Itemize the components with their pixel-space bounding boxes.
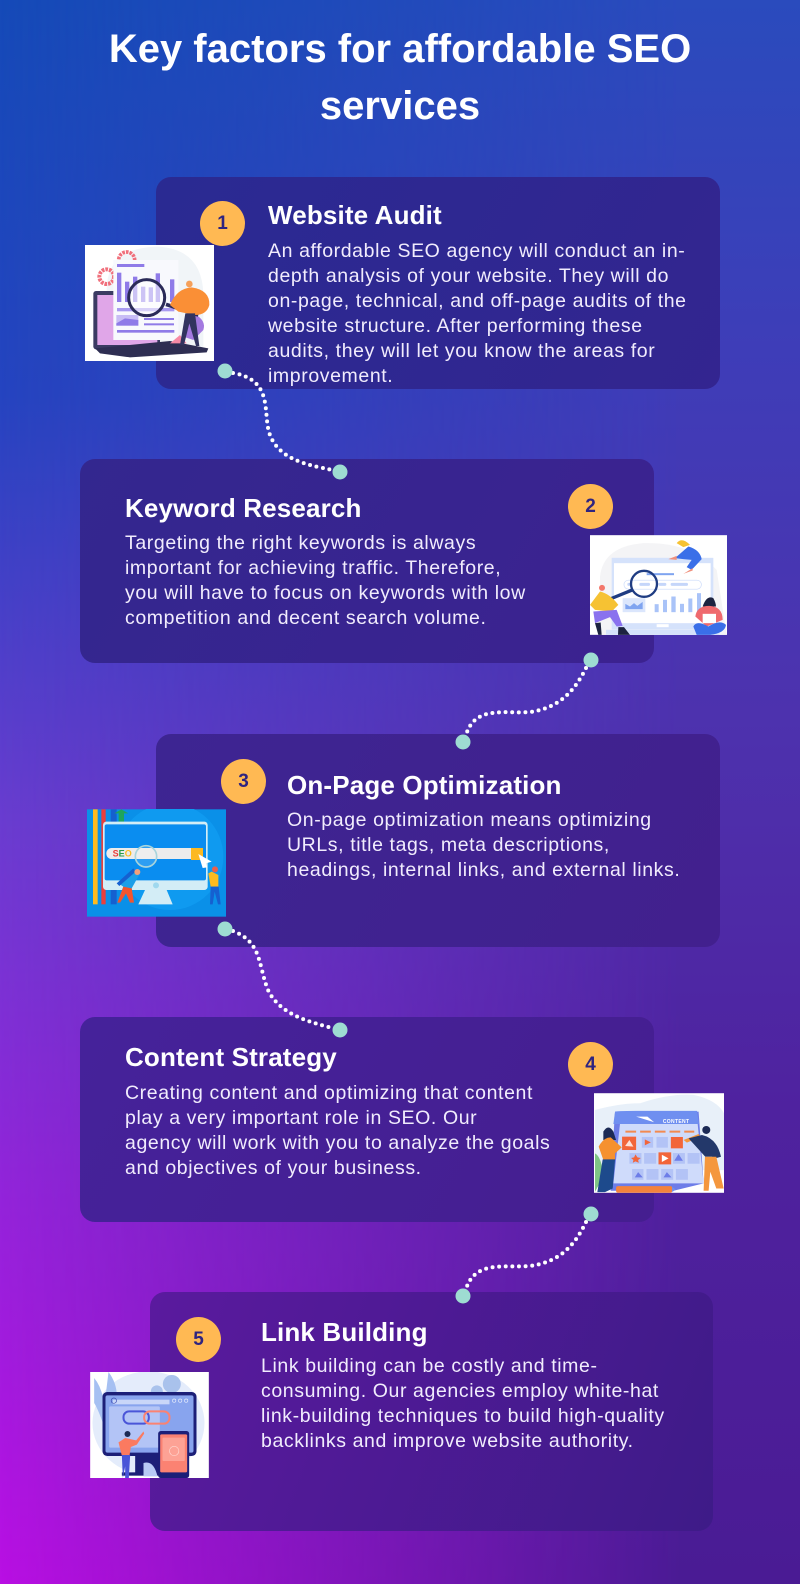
panel: on-page optimization [156,734,720,947]
badge: step 1: 1 [217,213,228,234]
text: website audit description [268,240,687,387]
panel: link building [150,1292,713,1531]
text: keyword research description: important for achieving traffic. Therefore, [125,557,501,579]
text: content strategy description: play a very important role in SEO. Our [125,1107,477,1129]
title [109,27,691,128]
text: link building description [261,1355,665,1452]
connector: step 2 to step 3 [456,652,598,750]
icon: SEO monitor illustration: SEO [113,848,132,858]
text: content strategy description: agency will work with you to analyze the goals [125,1132,550,1154]
connector: step 4 to step 5 [456,1206,598,1304]
text: website audit description: depth analysis of your website. They will do [268,265,669,287]
title: services [320,84,480,128]
icon: SEO monitor illustration [87,809,226,917]
icon: content calendar illustration [594,1093,724,1193]
badge: step 2 [568,484,613,529]
text: on-page optimization description: URLs, title tags, meta descriptions, [287,834,610,856]
text: link building description: link-building techniques to build high-quality [261,1405,665,1427]
icon: laptop audit illustration [85,245,214,361]
badge: step 1 [200,201,245,246]
panel: keyword research [80,459,654,663]
icon: keyword search illustration [590,535,727,635]
text: on-page optimization description: headings, internal links, and external links. [287,859,680,881]
heading: on-page optimization: On-Page Optimization [287,770,562,800]
connector: step 3 to step 4 [218,922,348,1038]
heading: content strategy: Content Strategy [125,1042,337,1072]
badge: step 3 [221,759,266,804]
connector: step 1 to step 2 [218,364,348,480]
badge: step 2: 2 [585,496,596,517]
text: website audit description: audits, they will let you know the areas for [268,340,655,362]
text: keyword research description: you will have to focus on keywords with low [125,582,526,604]
panel: content strategy [80,1017,654,1222]
text: link building description: consuming. Our agencies employ white-hat [261,1380,659,1402]
text: keyword research description: competition and decent search volume. [125,607,486,629]
text: link building description: backlinks and improve website authority. [261,1430,634,1452]
badge: step 4 [568,1042,613,1087]
badge: step 4: 4 [585,1054,596,1075]
text: content strategy description: Creating content and optimizing that content [125,1082,533,1104]
heading: website audit: Website Audit [268,200,442,230]
heading: keyword research: Keyword Research [125,493,362,523]
text: website audit description: An affordable SEO agency will conduct an in- [268,240,685,262]
text: keyword research description: Targeting the right keywords is always [125,532,476,554]
text: content strategy description [125,1082,550,1179]
text: website audit description: improvement. [268,365,393,387]
icon: content calendar illustration: CONTENT [663,1119,689,1125]
text: on-page optimization description: On-page optimization means optimizing [287,809,652,831]
badge: step 3: 3 [238,771,249,792]
text: content strategy description: and objectives of your business. [125,1157,422,1179]
text: website audit description: on-page, technical, and off-page audits of the [268,290,687,312]
icon: link building illustration [90,1372,209,1478]
heading: link building: Link Building [261,1317,428,1347]
badge: step 5 [176,1317,221,1362]
badge: step 5: 5 [193,1329,204,1350]
text: on-page optimization description [287,809,680,881]
panel: website audit [156,177,720,389]
text: website audit description: website structure. After performing these [268,315,643,337]
text: link building description: Link building can be costly and time- [261,1355,598,1377]
title: Key factors for affordable SEO [109,27,691,71]
text: keyword research description [125,532,526,629]
